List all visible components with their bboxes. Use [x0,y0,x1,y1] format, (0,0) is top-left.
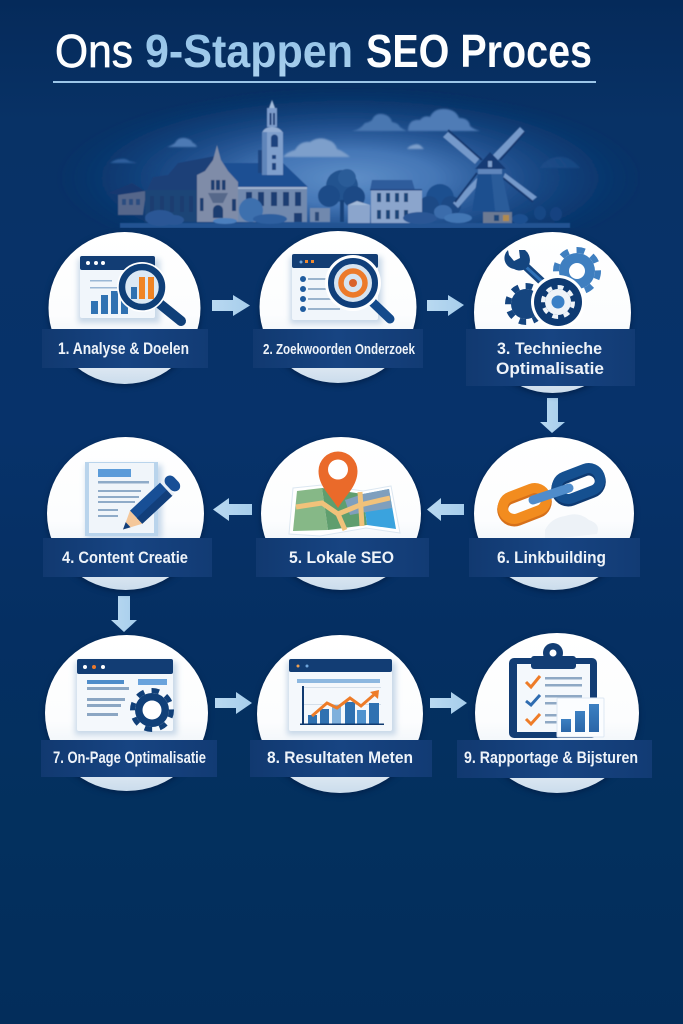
label [466,329,635,386]
icon: clipboard with checks and chart [509,643,604,738]
circle [48,232,200,384]
step 5: Lokale SEO [256,437,429,590]
small houses [310,201,370,223]
icon: document with pencil [85,462,183,539]
church gable [197,145,238,222]
title: 9-Stappen [145,25,353,77]
step 5: Lokale SEO: 5. Lokale SEO [289,549,394,567]
step 1: Analyse & Doelen: 1. Analyse & Doelen [58,340,189,358]
trees [318,169,461,222]
arrow: step 7 to 8 [215,692,252,714]
title underline [53,81,596,83]
step 6: Linkbuilding: 6. Linkbuilding [497,549,606,567]
step 4: Content Creatie [43,437,212,590]
arrow: step 6 to 5 [427,498,464,521]
arrow: step 3 to 6 [540,398,565,433]
icon: chart window [287,659,396,735]
windmill [443,127,537,223]
town house [370,180,422,223]
circle [47,437,204,590]
foreground bushes [145,198,562,226]
arrows [111,295,565,714]
step 1: Analyse & Doelen [42,232,208,384]
circle [475,633,639,793]
label [256,538,429,577]
step 2: Zoekwoorden Onderzoek [253,231,423,383]
illustration: Dutch town skyline with church and windmill [102,100,598,228]
circle [474,232,631,393]
clouds [110,109,580,168]
circle [257,635,423,793]
arrow: step 1 to 2 [212,295,250,316]
step 2: Zoekwoorden Onderzoek: 2. Zoekwoorden Onderzoek [263,341,416,358]
step 6: Linkbuilding [469,437,640,590]
arrow: step 2 to 3 [427,295,464,316]
small house left [117,184,146,216]
label [43,538,212,577]
step 4: Content Creatie: 4. Content Creatie [62,549,188,567]
step 3: Technieche Optimalisatie [466,232,635,393]
arrow: step 5 to 4 [213,498,252,521]
icon: browser list with target magnifier [290,254,390,324]
circle [45,635,208,791]
church tower [258,100,283,175]
label [41,740,217,777]
step 3: Technieche Optimalisatie: Optimalisatie [496,360,604,378]
label [469,538,640,577]
arrow: step 4 to 7 [111,596,137,632]
left church hall [145,156,215,222]
icon: browser chart with magnifier [78,256,181,323]
title: Ons [55,25,133,77]
circle [260,231,416,383]
ground band [120,223,570,228]
icon: browser with gear [75,659,177,735]
label [42,329,208,368]
arrow: step 8 to 9 [430,692,467,714]
circle [261,437,421,590]
step 9: Rapportage & Bijsturen: 9. Rapportage & Bijsturen [464,749,638,767]
label [457,740,652,778]
icon: wrench and gears [504,250,598,329]
step 7: On-Page Optimalisatie [41,635,217,791]
label [253,329,423,368]
label [250,740,432,777]
icon: map with location pin [289,452,400,536]
step 9: Rapportage & Bijsturen [457,633,652,793]
circle [474,437,634,590]
church main building [223,163,308,222]
title: SEO Proces [366,25,592,77]
step 8: Resultaten Meten: 8. Resultaten Meten [267,749,413,767]
icon: chain links [499,465,604,538]
step 7: On-Page Optimalisatie: 7. On-Page Optimalisatie [53,749,206,767]
step 3: Technieche Optimalisatie: 3. Technieche [497,340,602,358]
title [55,25,592,77]
step 8: Resultaten Meten [250,635,432,793]
